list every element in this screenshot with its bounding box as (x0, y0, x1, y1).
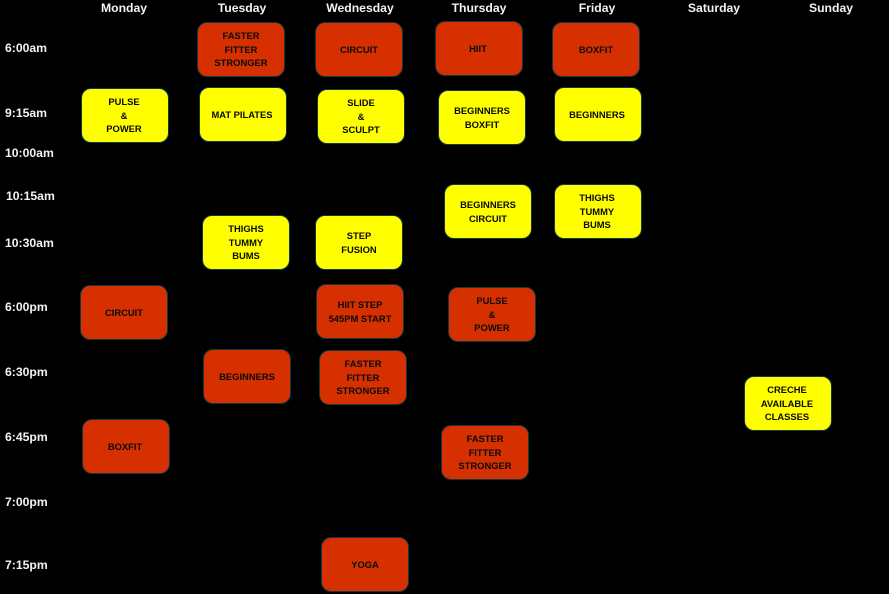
heading: Saturday: Saturday (688, 1, 740, 15)
class: Yoga, Wednesday (321, 537, 409, 592)
heading: Sunday: Sunday (809, 1, 853, 15)
class: Step Fusion, Wednesday: FUSION (341, 244, 377, 255)
class: Faster Fitter Stronger, Thursday (441, 425, 529, 480)
class: Faster Fitter Stronger, Thursday: FASTER (466, 433, 503, 444)
legend: creche available classes: AVAILABLE (761, 398, 813, 409)
heading: Thursday: Thursday (452, 1, 506, 15)
time: 6:45pm: 6:45pm (5, 430, 48, 444)
time: 10:00am: 10:00am (5, 146, 54, 160)
class: HIIT Step, Wednesday: 545PM START (329, 313, 391, 324)
class: Step Fusion, Wednesday: STEP (347, 230, 371, 241)
class: Slide and Sculpt, Wednesday: SLIDE (347, 97, 375, 108)
class: Beginners Boxfit, Thursday (438, 90, 526, 145)
time: 6:00pm: 6:00pm (5, 300, 48, 314)
class: Beginners, Friday: BEGINNERS (569, 109, 625, 120)
class: Thighs Tummy Bums, Friday: BUMS (583, 219, 611, 230)
time: 7:00pm: 7:00pm (5, 495, 48, 509)
class: Pulse and Power, Thursday: PULSE (476, 295, 508, 306)
class: Beginners, Tuesday (203, 349, 291, 404)
class: Pulse and Power, Monday: PULSE (108, 96, 140, 107)
time: 6:30pm: 6:30pm (5, 365, 48, 379)
class: Slide and Sculpt, Wednesday: SCULPT (342, 124, 380, 135)
class: Slide and Sculpt, Wednesday: & (358, 111, 364, 122)
class: HIIT, Thursday (435, 21, 523, 76)
class: Pulse and Power, Thursday: & (489, 309, 495, 320)
time: 10:30am: 10:30am (5, 236, 54, 250)
class: Thighs Tummy Bums, Tuesday: THIGHS (228, 223, 264, 234)
heading: Tuesday: Tuesday (218, 1, 266, 15)
class: Faster Fitter Stronger, Wednesday: FASTER (344, 358, 381, 369)
class: Circuit, Monday: CIRCUIT (105, 307, 143, 318)
class: Step Fusion, Wednesday (315, 215, 403, 270)
class: HIIT Step, Wednesday: HIIT STEP (338, 299, 382, 310)
class: Slide and Sculpt, Wednesday (317, 89, 405, 144)
class: Pulse and Power, Monday: & (121, 110, 127, 121)
class: Boxfit, Monday: BOXFIT (108, 441, 142, 452)
heading: Friday: Friday (579, 1, 615, 15)
heading: Wednesday: Wednesday (326, 1, 394, 15)
class: Faster Fitter Stronger, Tuesday (197, 22, 285, 77)
class: Faster Fitter Stronger, Wednesday: FITTER (347, 372, 379, 383)
class: Beginners, Tuesday: BEGINNERS (219, 371, 275, 382)
class: Faster Fitter Stronger, Wednesday: STRONGER (336, 385, 390, 396)
class: Mat Pilates, Tuesday (199, 87, 287, 142)
class: Beginners Boxfit, Thursday: BOXFIT (465, 119, 499, 130)
class: Yoga, Wednesday: YOGA (351, 559, 379, 570)
class: Thighs Tummy Bums, Tuesday: BUMS (232, 250, 260, 261)
class: Boxfit, Friday (552, 22, 640, 77)
class: Thighs Tummy Bums, Friday: TUMMY (580, 206, 614, 217)
class: Beginners Circuit, Thursday (444, 184, 532, 239)
class: Faster Fitter Stronger, Thursday: FITTER (469, 447, 501, 458)
class: Faster Fitter Stronger, Thursday: STRONGER (458, 460, 512, 471)
class: Mat Pilates, Tuesday: MAT PILATES (211, 109, 273, 120)
time: 9:15am: 9:15am (5, 106, 47, 120)
class: Pulse and Power, Thursday: POWER (474, 322, 510, 333)
legend: creche available classes (744, 376, 832, 431)
class: Circuit, Wednesday: CIRCUIT (340, 44, 378, 55)
class: Thighs Tummy Bums, Tuesday: TUMMY (229, 237, 263, 248)
class: Beginners Circuit, Thursday: BEGINNERS (460, 199, 516, 210)
class: Boxfit, Friday: BOXFIT (579, 44, 613, 55)
legend: creche available classes: CRECHE (767, 384, 807, 395)
class: Pulse and Power, Monday: POWER (106, 123, 142, 134)
class: Circuit, Wednesday (315, 22, 403, 77)
time: 6:00am: 6:00am (5, 41, 47, 55)
class: Circuit, Monday (80, 285, 168, 340)
class: Faster Fitter Stronger, Tuesday: FITTER (225, 44, 257, 55)
class: Faster Fitter Stronger, Tuesday: STRONGER (214, 57, 268, 68)
class: Thighs Tummy Bums, Friday: THIGHS (579, 192, 615, 203)
class: Faster Fitter Stronger, Tuesday: FASTER (222, 30, 259, 41)
time: 7:15pm: 7:15pm (5, 558, 48, 572)
time: 10:15am: 10:15am (6, 189, 55, 203)
class: HIIT Step, Wednesday (316, 284, 404, 339)
class: Beginners Circuit, Thursday: CIRCUIT (469, 213, 507, 224)
class: Faster Fitter Stronger, Wednesday (319, 350, 407, 405)
class: Pulse and Power, Thursday (448, 287, 536, 342)
class: HIIT, Thursday: HIIT (469, 43, 487, 54)
class: Thighs Tummy Bums, Tuesday (202, 215, 290, 270)
class: Thighs Tummy Bums, Friday (554, 184, 642, 239)
class: Beginners Boxfit, Thursday: BEGINNERS (454, 105, 510, 116)
class: Beginners, Friday (554, 87, 642, 142)
heading: Monday: Monday (101, 1, 147, 15)
class: Pulse and Power, Monday (81, 88, 169, 143)
legend: creche available classes: CLASSES (765, 411, 809, 422)
class: Boxfit, Monday (82, 419, 170, 474)
